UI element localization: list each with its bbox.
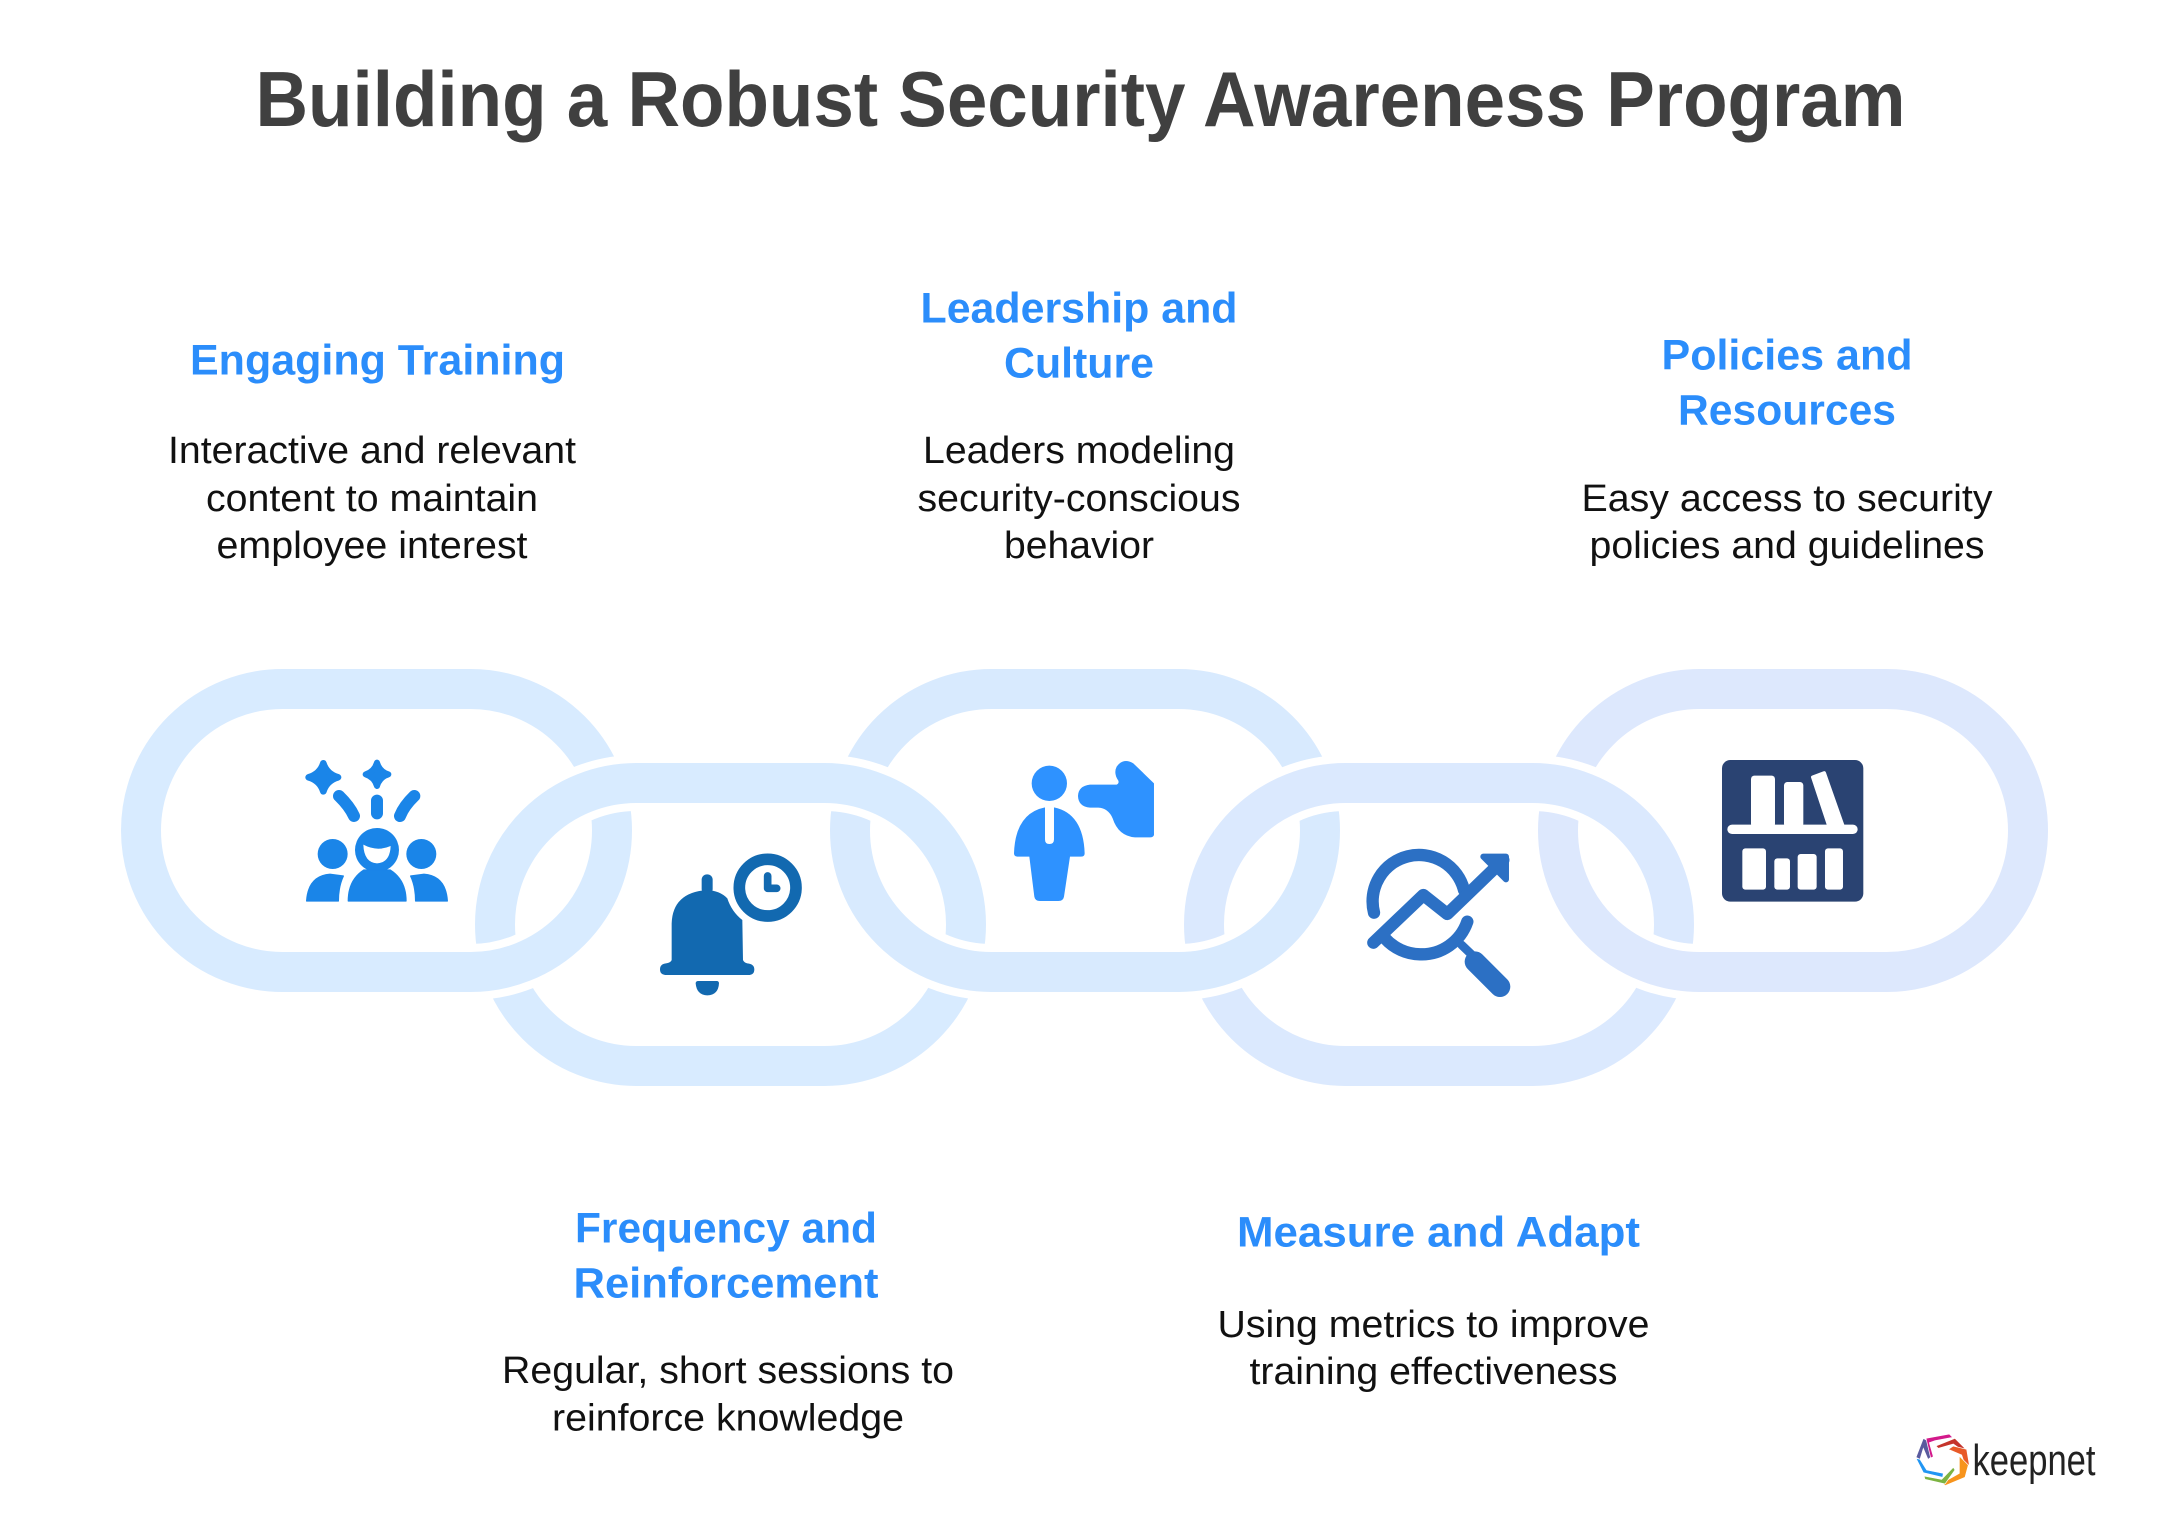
panel: leadership and culture text [918, 284, 1240, 567]
panel: engaging training text [168, 336, 576, 567]
description: engaging training [168, 430, 576, 567]
description: frequency and reinforcement [502, 1350, 954, 1440]
description: leadership and culture: behavior [1004, 525, 1154, 567]
icon: leader with pointing hand [1014, 761, 1154, 901]
heading: leadership and culture: Culture [1004, 340, 1154, 388]
icon: magnifier with rising chart line [1373, 855, 1506, 987]
title: Building a Robust Security Awareness Program [256, 55, 1906, 143]
description: engaging training: Interactive and relevant [168, 430, 576, 472]
icon: bookshelf with books [1722, 760, 1863, 902]
panel: policies and resources text [1582, 332, 1992, 567]
description: measure and adapt: Using metrics to improve [1218, 1304, 1650, 1346]
description: policies and resources [1582, 478, 1992, 567]
heading: policies and resources: Resources [1678, 386, 1896, 434]
heading: frequency and reinforcement: Frequency and [575, 1204, 877, 1252]
chain of five interlocking links [141, 689, 2028, 1066]
logo: keepnet [1916, 1434, 2096, 1486]
description: frequency and reinforcement: Regular, short sessions to [502, 1350, 954, 1392]
description: leadership and culture [918, 430, 1240, 567]
logo wordmark: keepnet [1972, 1436, 2096, 1485]
description: measure and adapt: training effectiveness [1250, 1351, 1618, 1393]
panel: measure and adapt text [1218, 1208, 1650, 1393]
description: leadership and culture: Leaders modeling [923, 430, 1235, 472]
logo mark [1916, 1434, 1969, 1486]
description: engaging training: content to maintain [206, 478, 538, 520]
heading: engaging training: Engaging Training [190, 336, 565, 384]
description: engaging training: employee interest [216, 525, 528, 567]
description: measure and adapt [1218, 1304, 1650, 1393]
heading: measure and adapt: Measure and Adapt [1237, 1208, 1640, 1256]
heading: leadership and culture [920, 284, 1238, 388]
heading: leadership and culture: Leadership and [920, 284, 1238, 332]
description: policies and resources: Easy access to security [1582, 478, 1992, 520]
heading: frequency and reinforcement [574, 1204, 878, 1308]
description: frequency and reinforcement: reinforce knowledge [552, 1398, 904, 1440]
icon: cheering team with sparkles [307, 763, 447, 901]
heading: frequency and reinforcement: Reinforcement [574, 1260, 878, 1308]
heading: policies and resources [1662, 332, 1912, 434]
heading: policies and resources: Policies and [1662, 332, 1912, 380]
panel: frequency and reinforcement text [502, 1204, 954, 1440]
description: leadership and culture: security-conscious [918, 478, 1240, 520]
icon: bell with clock [660, 859, 796, 995]
description: policies and resources: policies and guidelines [1590, 525, 1984, 567]
